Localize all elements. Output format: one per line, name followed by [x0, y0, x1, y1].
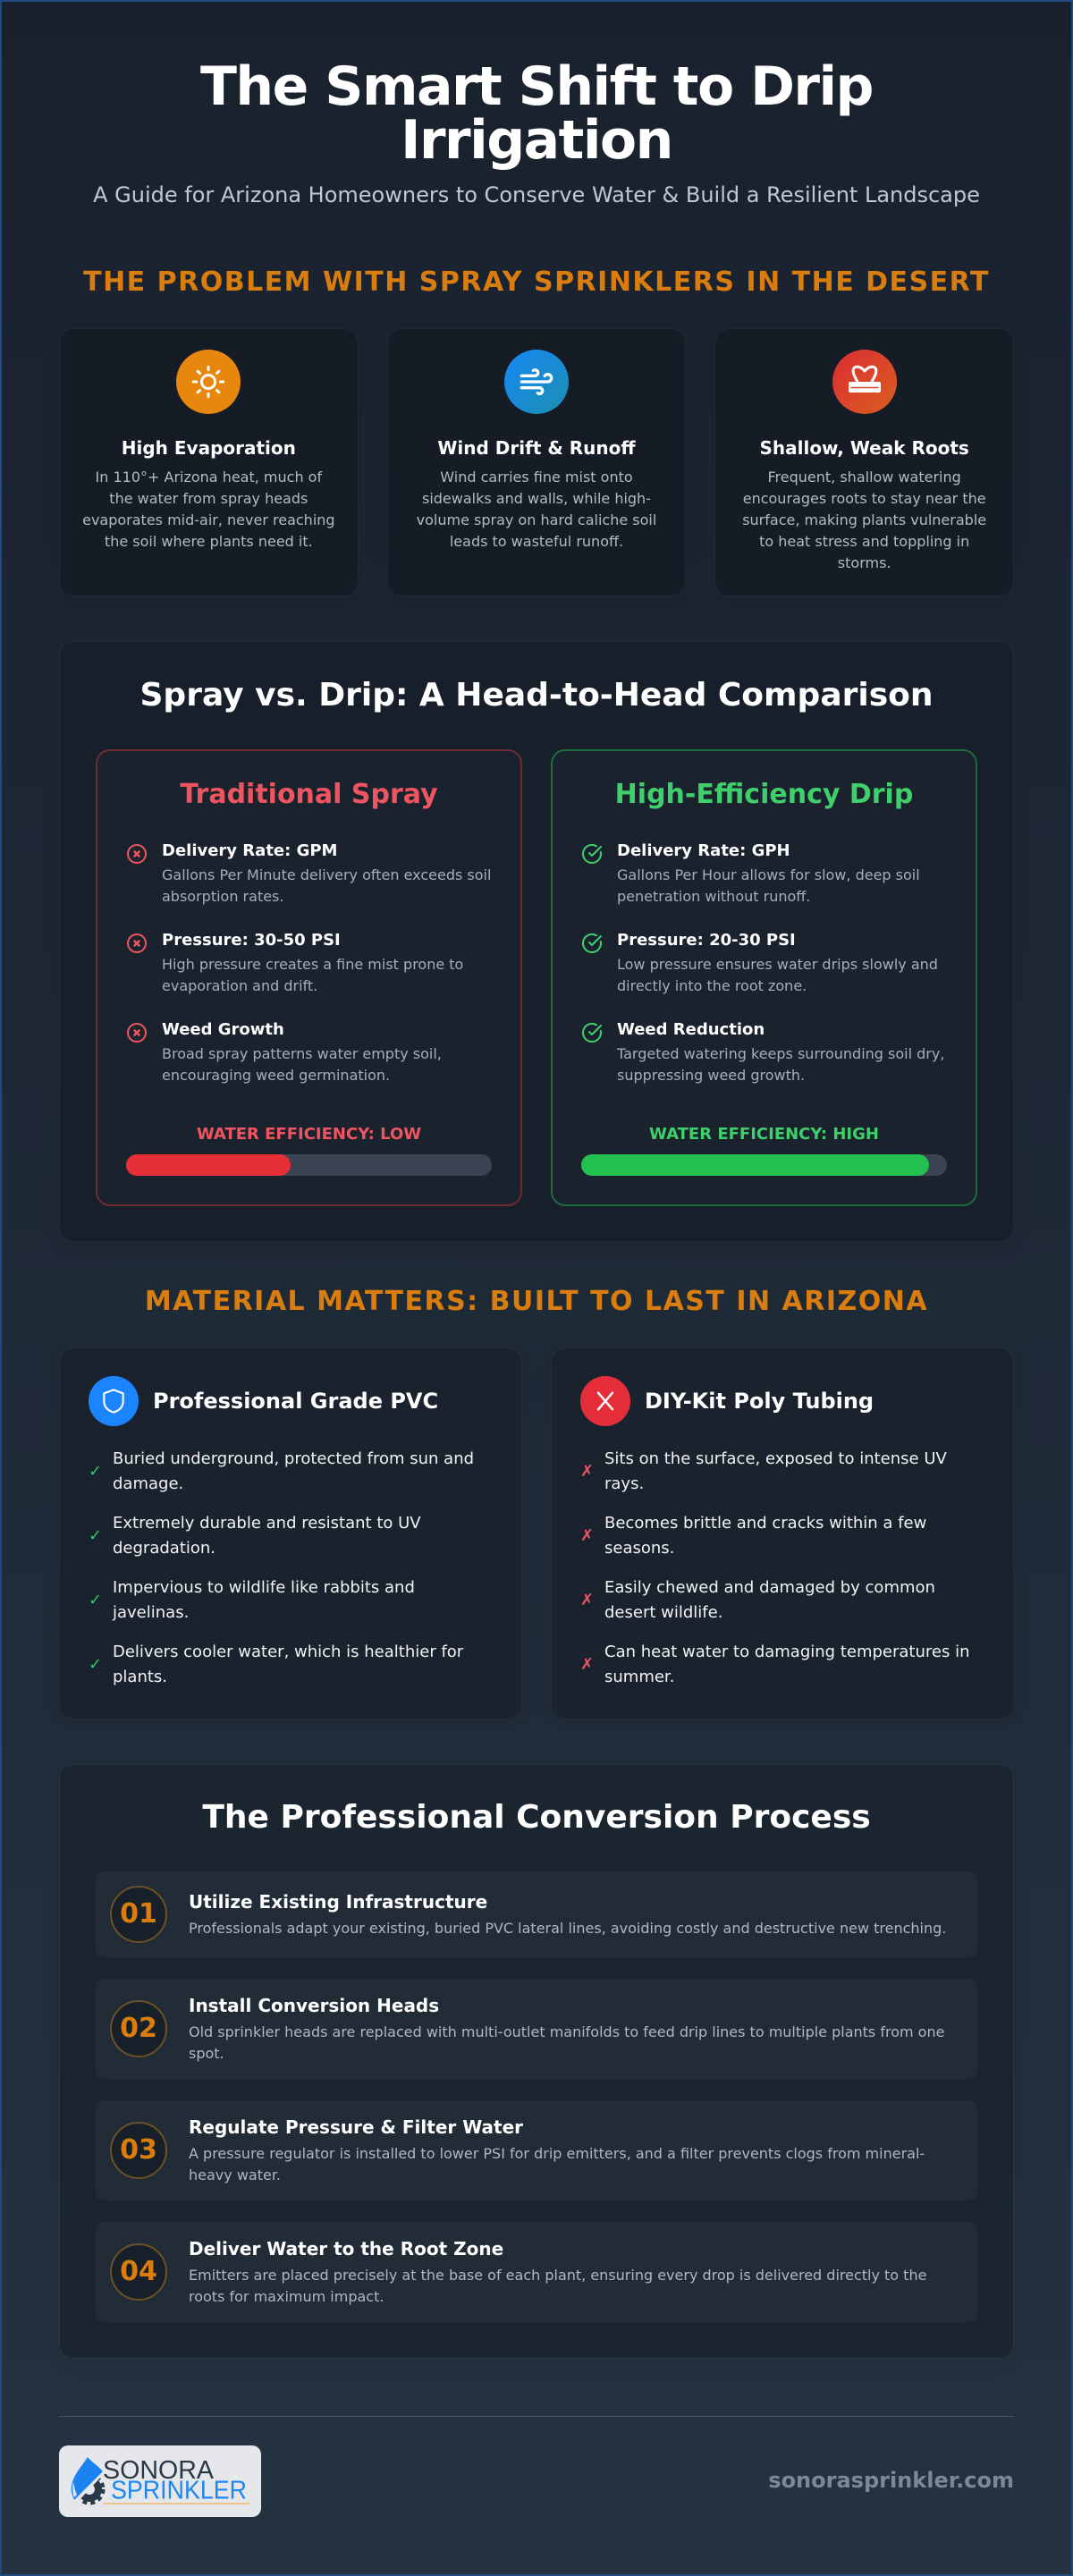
drawback: Easily chewed and damaged by common: [604, 1578, 935, 1597]
subtitle: A Guide for Arizona Homeowners to Conserve Water & Build a Resilient Landscape: [93, 182, 980, 207]
benefit: Buried underground, protected from sun and: [113, 1449, 474, 1468]
logo gear: [75, 2475, 104, 2504]
logo underline: [103, 2503, 249, 2504]
benefit: Extremely durable and resistant to UV: [113, 1514, 421, 1533]
description: directly into the root zone.: [617, 977, 807, 994]
icon: shield: [89, 1376, 139, 1426]
label: Pressure: 20-30 PSI: [617, 931, 796, 950]
drawback: [604, 1643, 969, 1686]
benefit: [113, 1578, 415, 1622]
item: delivery rate: [127, 841, 491, 905]
step text: heavy water.: [189, 2166, 281, 2183]
panel: shallow roots: [714, 328, 1014, 596]
panel: conversion process: [59, 1764, 1014, 2359]
title: [200, 55, 873, 172]
cross: ✗: [580, 1462, 594, 1481]
description: evaporation and drift.: [162, 977, 317, 994]
icon: x circle: [127, 933, 147, 953]
label: Delivery Rate: GPH: [617, 841, 790, 860]
step text: Professionals adapt your existing, buried PVC lateral lines, avoiding costly and destructive new trenching.: [189, 1920, 946, 1937]
description: [162, 866, 491, 905]
heading: comparison: Spray vs. Drip: A Head-to-Head Comparison: [139, 677, 934, 714]
benefit: [113, 1514, 421, 1558]
label: Weed Reduction: [617, 1020, 765, 1039]
description: penetration without runoff.: [617, 888, 810, 905]
text: wind drift: sidewalks and walls, while high-: [422, 490, 651, 507]
logo: [59, 2445, 261, 2517]
text: high evaporation: evaporates mid-air, never reaching: [82, 511, 335, 528]
item: pressure: [127, 931, 463, 994]
number 02: [110, 2000, 167, 2057]
number 04: [110, 2243, 167, 2301]
step text: spot.: [189, 2045, 224, 2062]
step text: [189, 2023, 944, 2062]
icon: x circle: [127, 844, 147, 864]
check: ✓: [89, 1526, 102, 1545]
drawback: rays.: [604, 1474, 644, 1493]
heading: traditional spray: Traditional Spray: [180, 779, 438, 810]
bar: efficiency high: [581, 1154, 947, 1176]
cross: ✗: [580, 1591, 594, 1609]
check: ✓: [89, 1462, 102, 1481]
step title: Regulate Pressure & Filter Water: [189, 2116, 523, 2138]
step title: Install Conversion Heads: [189, 1995, 439, 2016]
description: [617, 866, 920, 905]
benefit: javelinas.: [113, 1603, 189, 1622]
step 2: [96, 1979, 977, 2079]
icon: x: [580, 1376, 630, 1426]
title: Irrigation: [401, 109, 672, 172]
description: [617, 1045, 944, 1084]
check: ✓: [89, 1591, 102, 1609]
benefit: degradation.: [113, 1539, 215, 1558]
drawback: summer.: [604, 1668, 674, 1686]
benefit: Impervious to wildlife like rabbits and: [113, 1578, 415, 1597]
card: traditional spray: [96, 749, 522, 1206]
icon: check circle: [581, 844, 602, 864]
text: high evaporation: the soil where plants need it.: [105, 533, 313, 550]
panel: comparison: [59, 641, 1014, 1242]
logo wordmark: sprinkler: SPRINKLER: [111, 2477, 247, 2505]
text: shallow roots: Frequent, shallow watering: [767, 469, 961, 486]
heading: process: The Professional Conversion Process: [202, 1799, 871, 1836]
description: Broad spray patterns water empty soil,: [162, 1045, 442, 1062]
list: pvc benefits: [89, 1449, 474, 1686]
label: efficiency high: WATER EFFICIENCY: HIGH: [649, 1125, 879, 1144]
step text: [189, 2145, 925, 2183]
panel: diy-kit poly tubing: [551, 1347, 1014, 1719]
description: suppressing weed growth.: [617, 1067, 805, 1084]
number 04: 04: [120, 2256, 157, 2287]
step 1: [96, 1871, 977, 1957]
heading: the problem: THE PROBLEM WITH SPRAY SPRINKLERS IN THE DESERT: [83, 266, 990, 298]
description: Gallons Per Hour allows for slow, deep soil: [617, 866, 920, 883]
description: [162, 956, 463, 994]
step text: Emitters are placed precisely at the base of each plant, ensuring every drop is delivered directly to the: [189, 2267, 926, 2284]
benefit: damage.: [113, 1474, 183, 1493]
icon: check circle: [581, 1023, 602, 1043]
heading: shallow roots: Shallow, Weak Roots: [759, 437, 969, 459]
heading: material matters: MATERIAL MATTERS: BUILT TO LAST IN ARIZONA: [145, 1286, 928, 1317]
item: delivery rate: [581, 841, 920, 905]
heading: pvc: Professional Grade PVC: [153, 1389, 438, 1414]
text: high evaporation: In 110°+ Arizona heat, much of: [96, 469, 322, 486]
description: absorption rates.: [162, 888, 283, 905]
text: shallow roots: [742, 469, 986, 571]
panel: high evaporation: [59, 328, 359, 596]
benefit: [113, 1643, 463, 1686]
label: efficiency low: WATER EFFICIENCY: LOW: [197, 1125, 421, 1144]
logo drop: [72, 2457, 103, 2500]
card: high-efficiency drip: [551, 749, 977, 1206]
item: pressure: [581, 931, 938, 994]
title: The Smart Shift to Drip: [200, 55, 873, 118]
item: weed growth: [127, 1020, 442, 1084]
number 02: 02: [120, 2013, 157, 2044]
text: wind drift: volume spray on hard caliche soil: [417, 511, 656, 528]
description: Gallons Per Minute delivery often exceeds soil: [162, 866, 491, 883]
drawback: [604, 1578, 935, 1622]
step text: Old sprinkler heads are replaced with multi-outlet manifolds to feed drip lines to multiple plants from one: [189, 2023, 944, 2040]
drawback: desert wildlife.: [604, 1603, 722, 1622]
description: [162, 1045, 442, 1084]
text: shallow roots: surface, making plants vulnerable: [742, 511, 986, 528]
benefit: [113, 1449, 474, 1493]
text: shallow roots: storms.: [838, 554, 891, 571]
panel: wind drift: [387, 328, 686, 596]
step title: Deliver Water to the Root Zone: [189, 2238, 503, 2259]
label: Delivery Rate: GPM: [162, 841, 337, 860]
step 4: [96, 2222, 977, 2322]
drawback: Can heat water to damaging temperatures in: [604, 1643, 969, 1661]
step text: roots for maximum impact.: [189, 2288, 384, 2305]
list: poly drawbacks: [580, 1449, 969, 1686]
check: ✓: [89, 1655, 102, 1674]
icon: x circle: [127, 1023, 147, 1043]
number 01: [110, 1886, 167, 1943]
heading: high-efficiency drip: High-Efficiency Drip: [615, 779, 913, 810]
description: High pressure creates a fine mist prone to: [162, 956, 463, 973]
description: Low pressure ensures water drips slowly and: [617, 956, 938, 973]
text: shallow roots: to heat stress and toppling in: [759, 533, 969, 550]
text: high evaporation: the water from spray heads: [109, 490, 308, 507]
step text: [189, 2267, 926, 2305]
text: shallow roots: encourages roots to stay near the: [743, 490, 986, 507]
description: encouraging weed germination.: [162, 1067, 390, 1084]
number 03: 03: [120, 2134, 157, 2166]
panel: professional grade pvc: [59, 1347, 522, 1719]
footer divider: [59, 2416, 1014, 2417]
text: high evaporation: [82, 469, 335, 550]
description: Targeted watering keeps surrounding soil dry,: [617, 1045, 944, 1062]
step 3: [96, 2100, 977, 2200]
drawback: Sits on the surface, exposed to intense UV: [604, 1449, 947, 1468]
heading: high evaporation: High Evaporation: [122, 437, 296, 459]
text: wind drift: leads to wasteful runoff.: [450, 533, 623, 550]
icon: sun: [176, 350, 241, 414]
label: Pressure: 30-50 PSI: [162, 931, 341, 950]
number 01: 01: [120, 1898, 157, 1930]
drawback: [604, 1449, 947, 1493]
description: [617, 956, 938, 994]
drawback: [604, 1514, 926, 1558]
icon: wind: [504, 350, 569, 414]
logo drop highlight: [72, 2482, 77, 2497]
heading: poly: DIY-Kit Poly Tubing: [645, 1389, 874, 1414]
icon: roots: [832, 350, 897, 414]
step title: Utilize Existing Infrastructure: [189, 1891, 487, 1913]
text: wind drift: Wind carries fine mist onto: [440, 469, 633, 486]
text: wind drift: [417, 469, 656, 550]
heading: wind drift: Wind Drift & Runoff: [437, 437, 636, 459]
item: weed reduction: [581, 1020, 944, 1084]
bar: efficiency low: [126, 1154, 492, 1176]
cross: ✗: [580, 1655, 594, 1674]
cross: ✗: [580, 1526, 594, 1545]
benefit: Delivers cooler water, which is healthier for: [113, 1643, 463, 1661]
website: sonorasprinkler.com: [768, 2468, 1014, 2493]
benefit: plants.: [113, 1668, 167, 1686]
icon: check circle: [581, 933, 602, 953]
drawback: Becomes brittle and cracks within a few: [604, 1514, 926, 1533]
label: Weed Growth: [162, 1020, 284, 1039]
drawback: seasons.: [604, 1539, 674, 1558]
number 03: [110, 2122, 167, 2179]
logo wordmark: sonora: SONORA: [103, 2456, 215, 2485]
step text: A pressure regulator is installed to lower PSI for drip emitters, and a filter prevents clogs from mineral-: [189, 2145, 925, 2162]
